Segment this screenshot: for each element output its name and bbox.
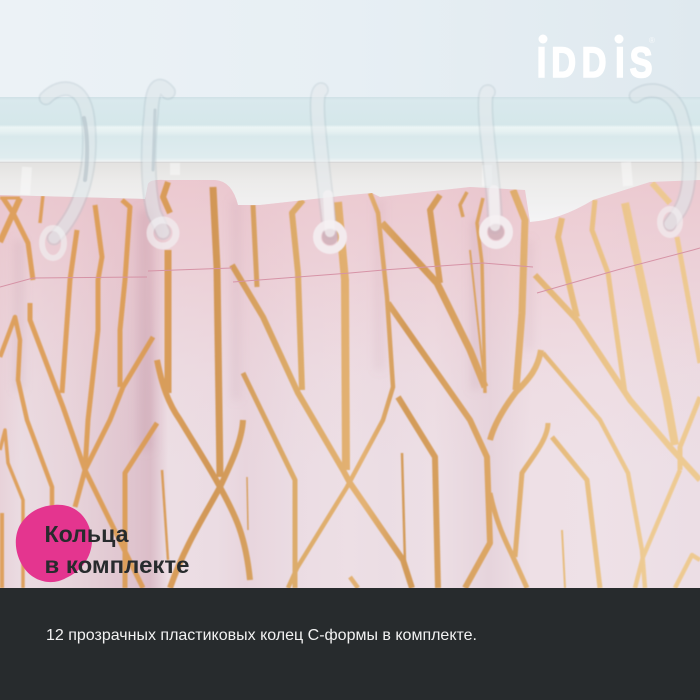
- stitched seam: [0, 248, 700, 293]
- top fabric tint: [0, 180, 700, 326]
- ring 1: [42, 89, 89, 258]
- left panel: [0, 196, 20, 200]
- ring 4: [483, 92, 509, 245]
- centre panel: [253, 205, 257, 287]
- brand logo: IDDIS: [537, 39, 653, 87]
- registered mark: ®: [649, 36, 655, 45]
- curtain: [0, 175, 700, 588]
- pink accent blob: [16, 505, 92, 582]
- caption text: 12 прозрачных пластиковых колец С-формы в комплекте.: [46, 627, 477, 644]
- bottom caption band: [0, 588, 700, 700]
- gold geometric pattern: [0, 182, 700, 588]
- background wall: [0, 0, 700, 100]
- front fold: [163, 182, 170, 213]
- logo dots: [538, 34, 624, 44]
- ring 2: [149, 87, 176, 246]
- right panel: [552, 437, 600, 588]
- curtain rod: [0, 97, 700, 163]
- second fold: [513, 190, 525, 390]
- heading: в комплекте: [44, 552, 190, 578]
- fold shadows: [16, 213, 480, 446]
- heading: Кольца: [44, 521, 129, 547]
- heading: [44, 521, 190, 578]
- ring 5: [636, 91, 689, 235]
- transparent C-rings: [42, 87, 689, 258]
- fabric base: [0, 175, 700, 588]
- wall below rod: [0, 160, 700, 230]
- rear hooks behind curtain: [25, 162, 628, 195]
- right-centre panel: [382, 223, 485, 387]
- ring 3: [317, 90, 343, 250]
